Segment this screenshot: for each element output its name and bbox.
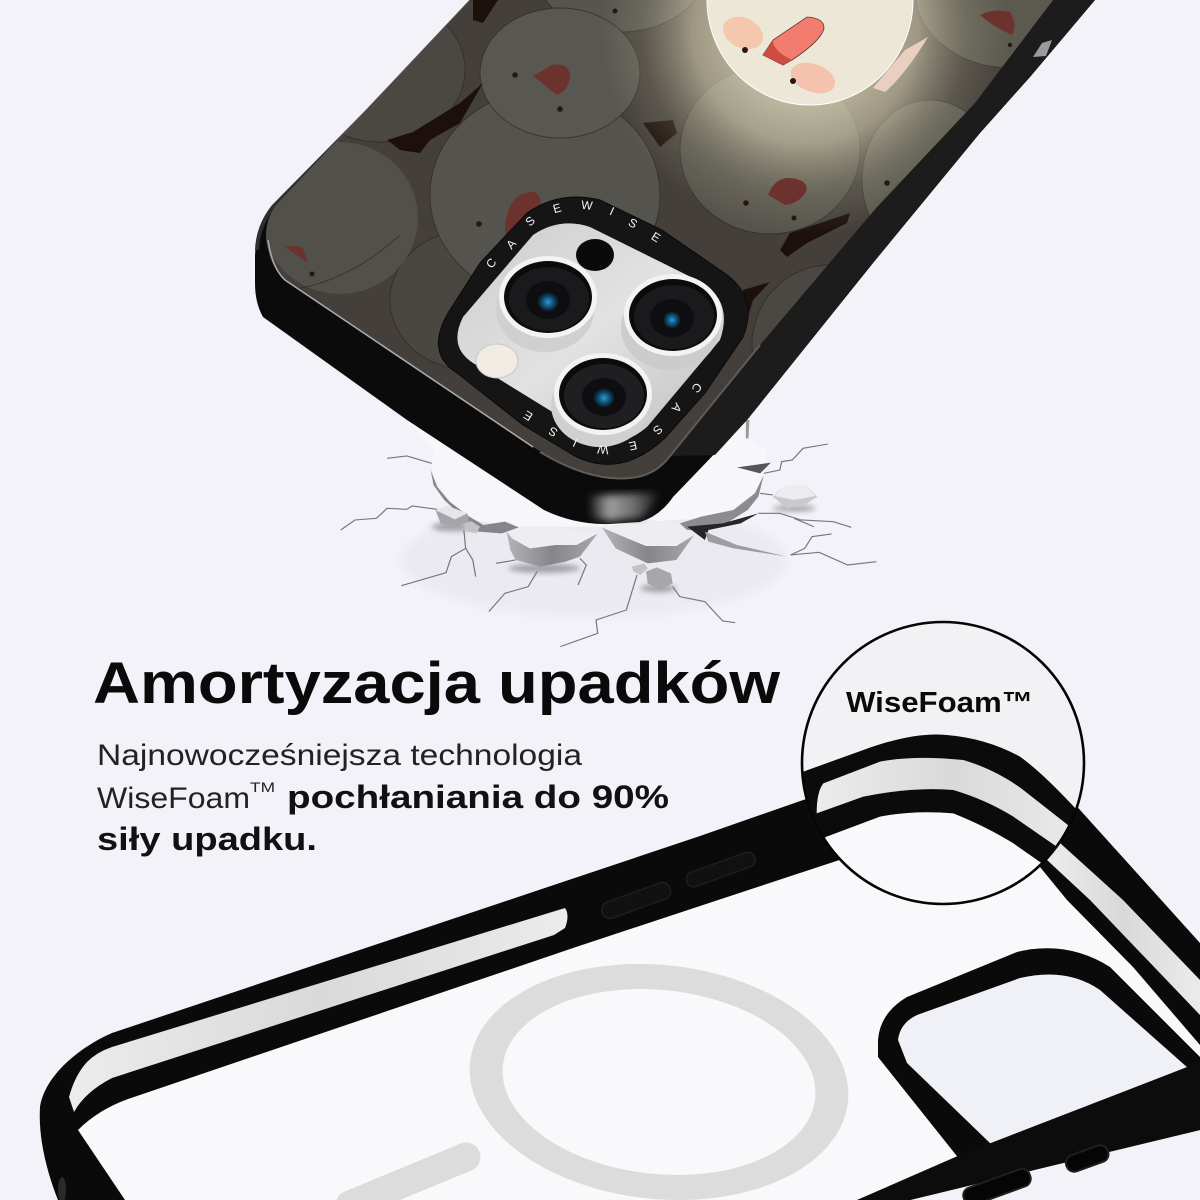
- CASEWISE ring text: C: [483, 255, 500, 271]
- MagSafe alignment bar: [350, 1157, 466, 1200]
- bottom ports: [961, 1143, 1111, 1200]
- foam strip left: [69, 908, 568, 1112]
- transparent interior: [78, 809, 1200, 1200]
- character noses and eyes: [285, 11, 1015, 263]
- glass rim reflection: [268, 240, 533, 447]
- lidar hole: [576, 239, 614, 271]
- lens 3: [551, 353, 652, 447]
- CASEWISE ring text: S: [650, 422, 666, 438]
- description text: siły upadku.: [97, 821, 317, 857]
- magnifier ring: [802, 622, 1084, 904]
- magnifier callout: [800, 620, 1086, 906]
- CASEWISE ring text: C: [688, 380, 705, 396]
- CASEWISE ring text: [483, 198, 705, 457]
- left corner notch: [58, 1177, 66, 1200]
- case outer body: [255, 0, 1095, 524]
- description text: Najnowocześniejsza technologia: [97, 739, 582, 772]
- CASEWISE ring text: S: [523, 213, 538, 229]
- CASEWISE ring text: E: [649, 229, 663, 245]
- side button glint: [1033, 40, 1052, 57]
- CASEWISE ring text: I: [571, 436, 580, 450]
- module frame: [438, 197, 748, 464]
- lens 1: [496, 256, 597, 352]
- CASEWISE ring text: A: [503, 237, 519, 252]
- flash: [476, 344, 518, 378]
- lens 2: [621, 274, 722, 370]
- silver camera plate: [457, 223, 724, 442]
- heading: Amortyzacja upadków: [93, 651, 781, 716]
- CASEWISE ring text: I: [607, 204, 616, 218]
- glass print with characters: [266, 0, 1053, 478]
- CASEWISE ring text: W: [596, 442, 609, 457]
- CASEWISE ring text: S: [626, 215, 640, 231]
- corner highlight: [588, 492, 660, 521]
- description text: TM: [250, 779, 275, 795]
- description text: [97, 739, 669, 857]
- camera cutout opening: [898, 974, 1188, 1145]
- camera cutout frame: [878, 948, 1200, 1160]
- black case frame: [40, 729, 1200, 1200]
- CASEWISE ring text: E: [521, 408, 535, 424]
- magnified foam frame: [804, 734, 1076, 862]
- clear case back view: [40, 729, 1200, 1200]
- foam strip right: [1047, 843, 1200, 1015]
- glowing main character: [707, 0, 928, 105]
- CASEWISE ring text: E: [551, 201, 563, 216]
- phone in printed case: [250, 0, 1105, 524]
- bottom band: [857, 1062, 1200, 1200]
- description text: pochłaniania do 90%: [287, 779, 669, 815]
- callout label: WiseFoam™: [846, 687, 1033, 719]
- cracked floor impact: [341, 420, 876, 647]
- MagSafe ring: [458, 946, 860, 1200]
- CASEWISE ring text: A: [669, 400, 685, 415]
- camera module: [438, 197, 748, 464]
- CASEWISE ring text: S: [546, 424, 560, 440]
- right side band: [670, 0, 1095, 456]
- description text: WiseFoam: [97, 782, 250, 815]
- dark gaps between characters: [387, 0, 850, 317]
- warm glow: [614, 0, 993, 224]
- side buttons: [599, 850, 757, 921]
- CASEWISE ring text: E: [628, 438, 638, 453]
- CASEWISE ring text: W: [581, 198, 594, 213]
